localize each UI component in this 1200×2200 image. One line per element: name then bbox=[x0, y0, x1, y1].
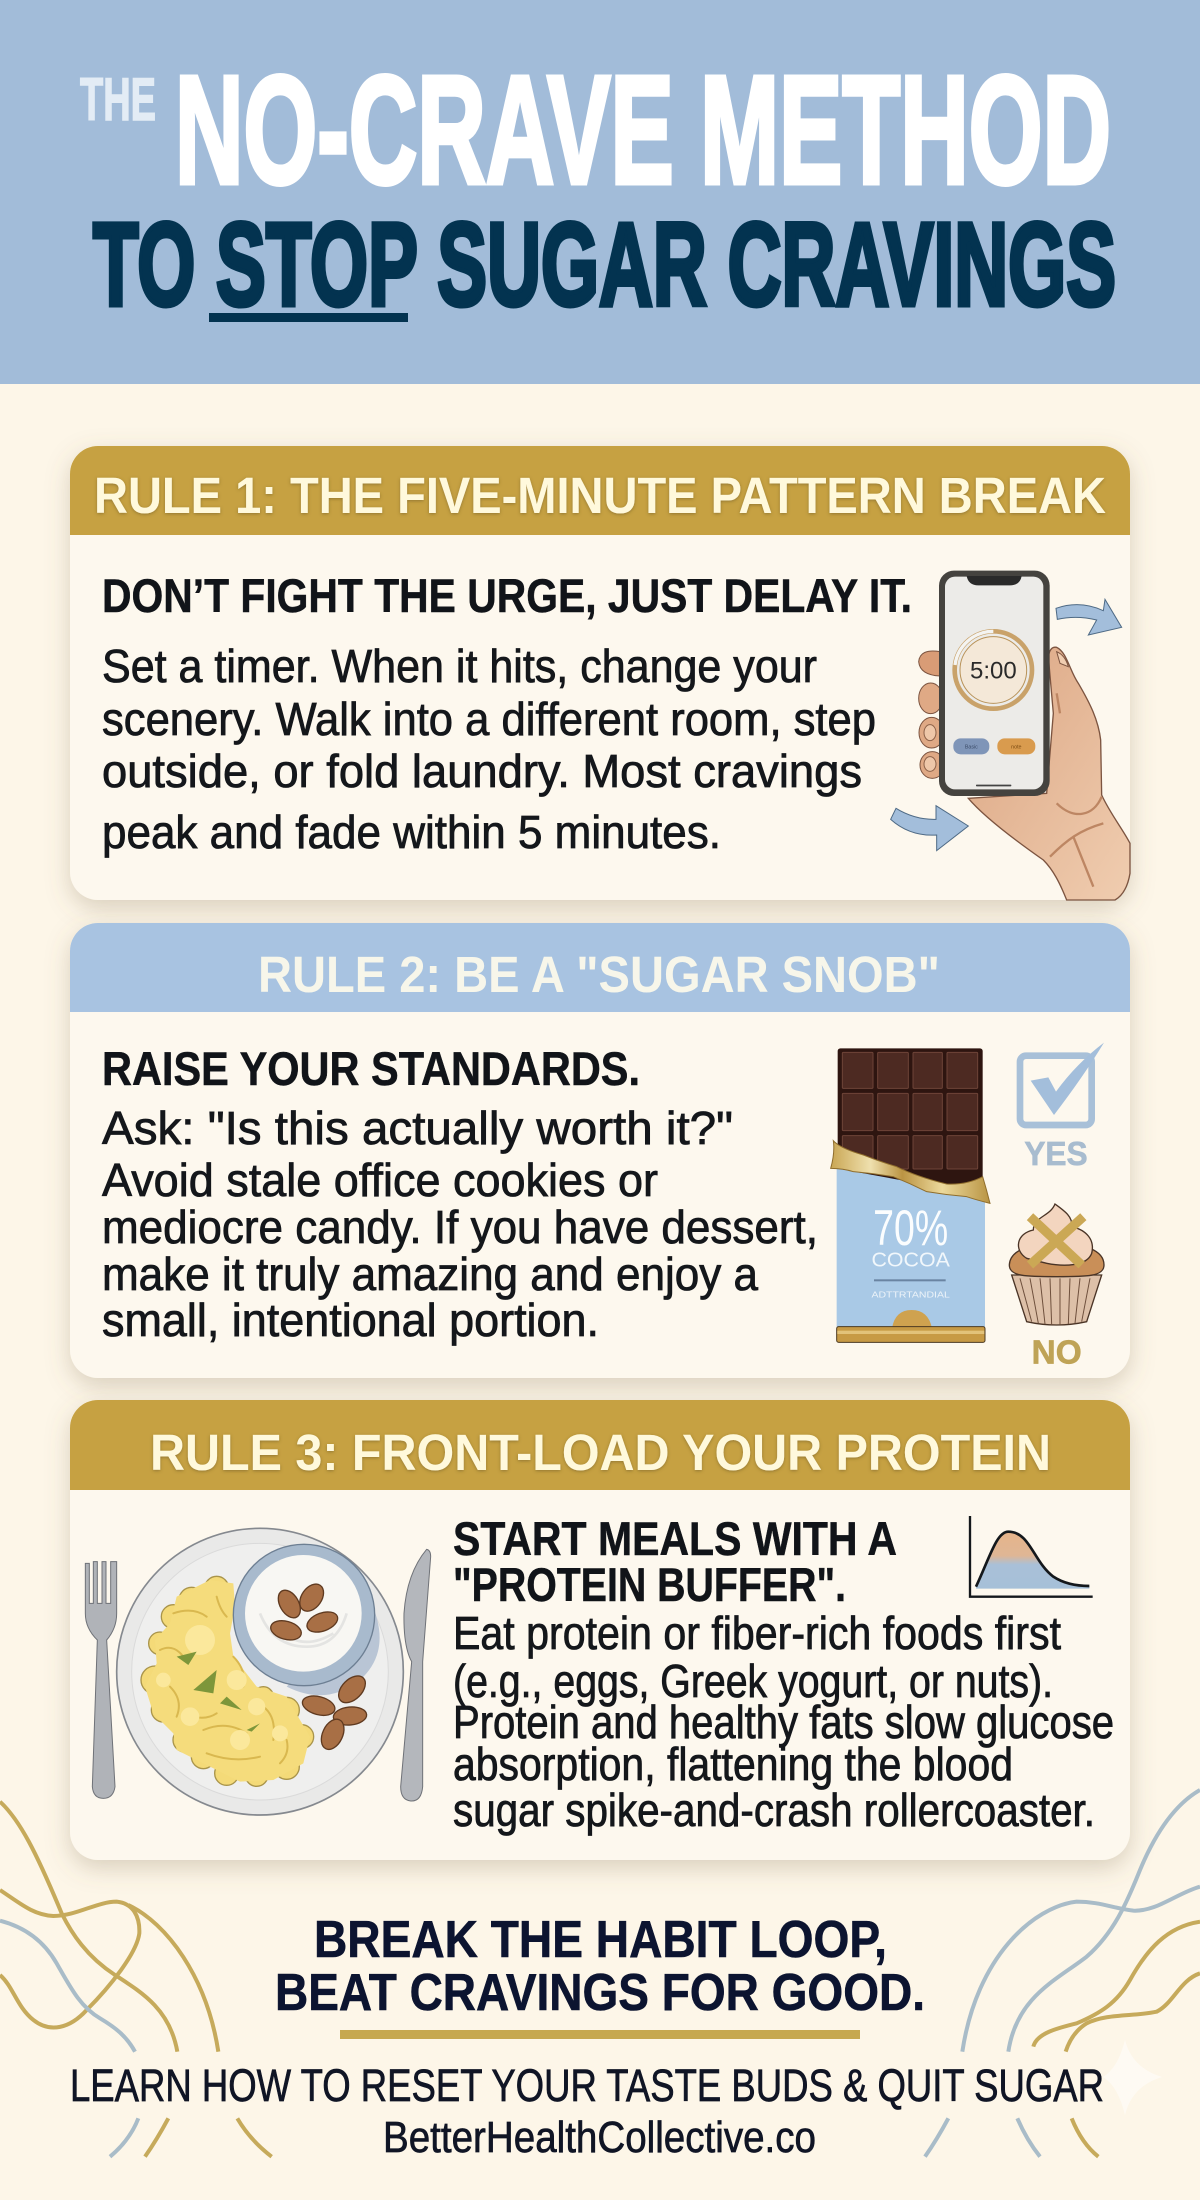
arrow: top right bbox=[1056, 599, 1122, 635]
panel: rule 1 bbox=[70, 446, 1130, 900]
icon: hand holding phone with timer: Basic bbox=[965, 744, 978, 750]
rule 3 body text: sugar spike-and-crash rollercoaster. bbox=[453, 1784, 1095, 1836]
icon: chocolate bar 70% cocoa bbox=[831, 1043, 1104, 1371]
rule 2 heading: RULE 2: BE A "SUGAR SNOB" bbox=[258, 946, 940, 1003]
icon: crossed-out cupcake bbox=[1009, 1204, 1104, 1371]
icon: sparkle bbox=[1103, 2040, 1162, 2115]
icon: chocolate bar 70% cocoa: 70% bbox=[873, 1200, 948, 1256]
fork bbox=[85, 1562, 117, 1798]
label: YES: YES bbox=[1024, 1136, 1088, 1173]
rule 2 body text: mediocre candy. If you have dessert, bbox=[102, 1201, 818, 1253]
rule 2 body text: small, intentional portion. bbox=[102, 1294, 599, 1346]
rule 2 subheading: RAISE YOUR STANDARDS. bbox=[102, 1042, 640, 1095]
arrow: bottom left bbox=[891, 806, 968, 851]
tagline: BREAK THE HABIT LOOP, bbox=[314, 1911, 887, 1969]
rule 3 subheading: START MEALS WITH A bbox=[453, 1512, 897, 1565]
icon: glucose curve chart bbox=[970, 1516, 1093, 1597]
rule 1 body text: outside, or fold laundry. Most cravings bbox=[102, 745, 862, 797]
plate bbox=[117, 1528, 403, 1815]
decorative curves: left bbox=[0, 1802, 272, 2157]
scrambled eggs bbox=[141, 1576, 314, 1786]
rule 2 body text: Ask: "Is this actually worth it?" bbox=[102, 1102, 733, 1154]
rule 3 body text bbox=[453, 1607, 1114, 1836]
almonds on yogurt bbox=[269, 1580, 340, 1643]
rule 3 body text: Protein and healthy fats slow glucose bbox=[453, 1696, 1114, 1748]
decorative curves: right bbox=[925, 1790, 1200, 2157]
rule 3 body text: Eat protein or fiber-rich foods first bbox=[453, 1607, 1061, 1659]
website: BetterHealthCollective.co bbox=[383, 2113, 816, 2162]
rule 1 body text: scenery. Walk into a different room, step bbox=[102, 693, 876, 745]
almonds on plate bbox=[300, 1671, 370, 1753]
rule 3 subheading: "PROTEIN BUFFER". bbox=[453, 1558, 846, 1611]
rule 2 body text: make it truly amazing and enjoy a bbox=[102, 1248, 758, 1300]
label: NO: NO bbox=[1032, 1334, 1082, 1371]
icon: chocolate bar 70% cocoa: ADTTRTANDIAL bbox=[871, 1289, 950, 1299]
rule 2 body text: Avoid stale office cookies or bbox=[102, 1154, 658, 1206]
underline under STOP bbox=[209, 313, 408, 322]
title: small word THE: THE bbox=[80, 66, 156, 133]
rule 1 subheading: DON’T FIGHT THE URGE, JUST DELAY IT. bbox=[102, 569, 912, 622]
rule 1 body text: Set a timer. When it hits, change your bbox=[102, 640, 817, 692]
rule 3 subheading bbox=[453, 1512, 897, 1611]
rule 1 heading: RULE 1: THE FIVE-MINUTE PATTERN BREAK bbox=[94, 467, 1106, 524]
rule 3 heading: RULE 3: FRONT-LOAD YOUR PROTEIN bbox=[150, 1424, 1051, 1481]
icon: yes checkbox bbox=[1020, 1043, 1104, 1173]
rule 2 body text bbox=[102, 1102, 818, 1346]
header banner bbox=[0, 0, 1200, 384]
rule 3 body text: (e.g., eggs, Greek yogurt, or nuts). bbox=[453, 1655, 1053, 1707]
rule 3 body text: absorption, flattening the blood bbox=[453, 1738, 1013, 1790]
panel: rule 2 bbox=[70, 923, 1130, 1378]
gold divider bbox=[340, 2030, 860, 2039]
rule 1 body text: peak and fade within 5 minutes. bbox=[102, 806, 721, 858]
rule 1 body text bbox=[102, 640, 876, 858]
icon: plate with eggs, yogurt and almonds bbox=[85, 1528, 431, 1815]
panel: rule 3 bbox=[70, 1400, 1130, 1860]
footer callout bbox=[70, 1911, 1104, 2162]
icon: chocolate bar 70% cocoa: COCOA bbox=[871, 1249, 950, 1272]
icon: hand holding phone with timer: note bbox=[1011, 744, 1022, 750]
knife bbox=[401, 1549, 431, 1801]
icon: hand holding phone with timer: 5:00 bbox=[970, 657, 1017, 684]
tagline: BEAT CRAVINGS FOR GOOD. bbox=[275, 1964, 925, 2022]
tagline bbox=[275, 1911, 925, 2022]
yogurt bowl bbox=[233, 1544, 375, 1686]
icon: hand holding phone with timer bbox=[891, 571, 1130, 900]
